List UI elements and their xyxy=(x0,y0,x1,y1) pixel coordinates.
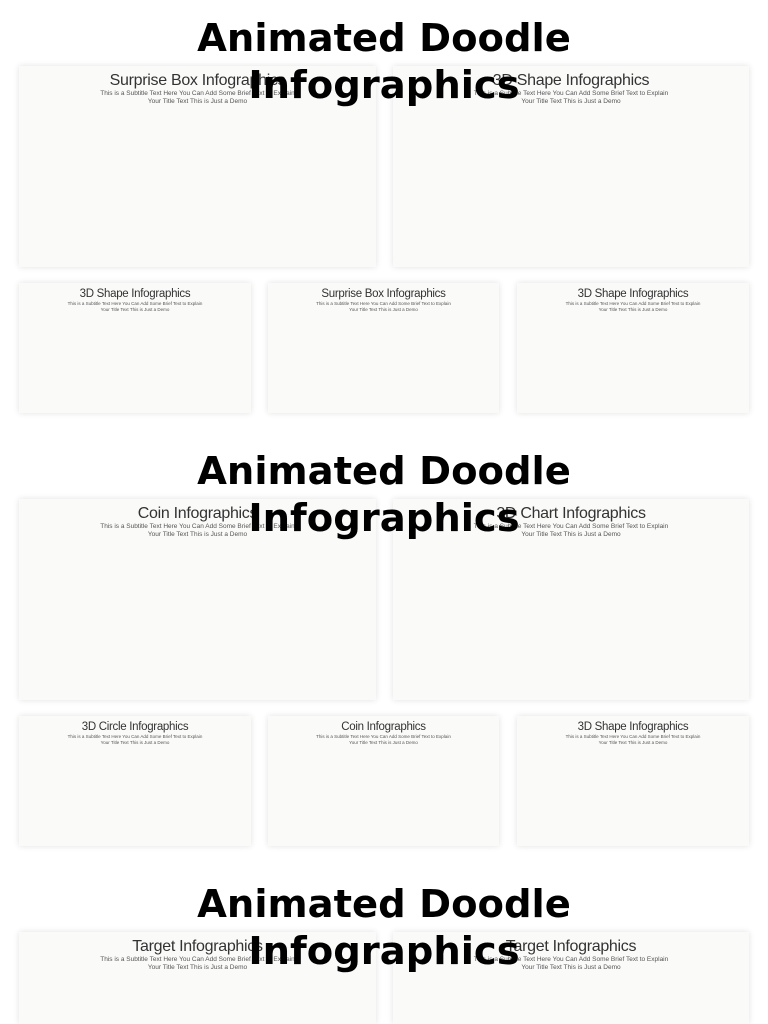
card: coin small xyxy=(268,716,499,846)
card: coin large: Coin Infographics xyxy=(138,505,257,522)
card: 3d shape large xyxy=(393,66,749,267)
card: coin large xyxy=(19,499,376,700)
card: 3d shape small xyxy=(517,716,749,846)
card: target large: This is a Subtitle Text Here You Can Add Some Brief Text to Explain Your Title Text This is Just a Demo xyxy=(100,956,295,971)
title: Infographics xyxy=(248,496,520,541)
card: 3d shape large: This is a Subtitle Text Here You Can Add Some Brief Text to Explain Your Title Text This is Just a Demo xyxy=(474,90,668,105)
card: 3d shape small 2 xyxy=(517,283,749,413)
card: target large 2: Target Infographics xyxy=(506,938,636,955)
card: surprise box small: Surprise Box Infographics xyxy=(321,288,446,300)
card: 3d shape small 2: This is a Subtitle Text Here You Can Add Some Brief Text to Explain Your Title Text This is Just a Demo xyxy=(566,301,700,312)
card: 3d shape small: 3D Shape Infographics xyxy=(578,721,688,733)
card: 3d shape small: 3D Shape Infographics xyxy=(80,288,190,300)
card: 3d circle small: 3D Circle Infographics xyxy=(82,721,188,733)
card: 3d shape small: This is a Subtitle Text Here You Can Add Some Brief Text to Explain Your Title Text This is Just a Demo xyxy=(566,734,700,745)
card: 3d shape large: 3D Shape Infographics xyxy=(493,72,649,89)
title xyxy=(197,449,571,541)
card: 3d chart large: 3D Chart Infographics xyxy=(496,505,646,522)
title: Animated Doodle xyxy=(197,449,571,494)
title: Animated Doodle xyxy=(197,16,571,61)
title xyxy=(197,882,571,974)
card: coin large: This is a Subtitle Text Here You Can Add Some Brief Text to Explain Your Title Text This is Just a Demo xyxy=(100,523,295,538)
card: surprise box small xyxy=(268,283,499,413)
card: target large 2 xyxy=(393,932,749,1024)
card: target large xyxy=(19,932,376,1024)
section 1 xyxy=(17,16,751,415)
card: surprise box small: This is a Subtitle Text Here You Can Add Some Brief Text to Explain Your Title Text This is Just a Demo xyxy=(316,301,451,312)
card: coin small: Coin Infographics xyxy=(341,721,426,733)
card: coin small: This is a Subtitle Text Here You Can Add Some Brief Text to Explain Your Title Text This is Just a Demo xyxy=(316,734,451,745)
card: 3d shape small: This is a Subtitle Text Here You Can Add Some Brief Text to Explain Your Title Text This is Just a Demo xyxy=(68,301,202,312)
card: surprise box large: This is a Subtitle Text Here You Can Add Some Brief Text to Explain Your Title Text This is Just a Demo xyxy=(100,90,295,105)
card: target large: Target Infographics xyxy=(132,938,263,955)
title: Infographics xyxy=(248,929,520,974)
card: 3d shape small 2: 3D Shape Infographics xyxy=(578,288,688,300)
title: Animated Doodle xyxy=(197,882,571,927)
card: surprise box large xyxy=(19,66,376,267)
card: 3d shape small xyxy=(19,283,251,413)
card: 3d chart large: This is a Subtitle Text Here You Can Add Some Brief Text to Explain Your Title Text This is Just a Demo xyxy=(474,523,668,538)
section 3 xyxy=(17,882,751,1023)
card: surprise box large: Surprise Box Infographics xyxy=(110,72,285,89)
card: 3d circle small: This is a Subtitle Text Here You Can Add Some Brief Text to Explain Your Title Text This is Just a Demo xyxy=(68,734,202,745)
card: 3d chart large xyxy=(393,499,749,700)
card: 3d circle small xyxy=(19,716,251,846)
title xyxy=(197,16,571,108)
section 2 xyxy=(17,449,751,848)
card: target large 2: This is a Subtitle Text Here You Can Add Some Brief Text to Explain Your Title Text This is Just a Demo xyxy=(474,956,668,971)
title: Infographics xyxy=(248,63,520,108)
